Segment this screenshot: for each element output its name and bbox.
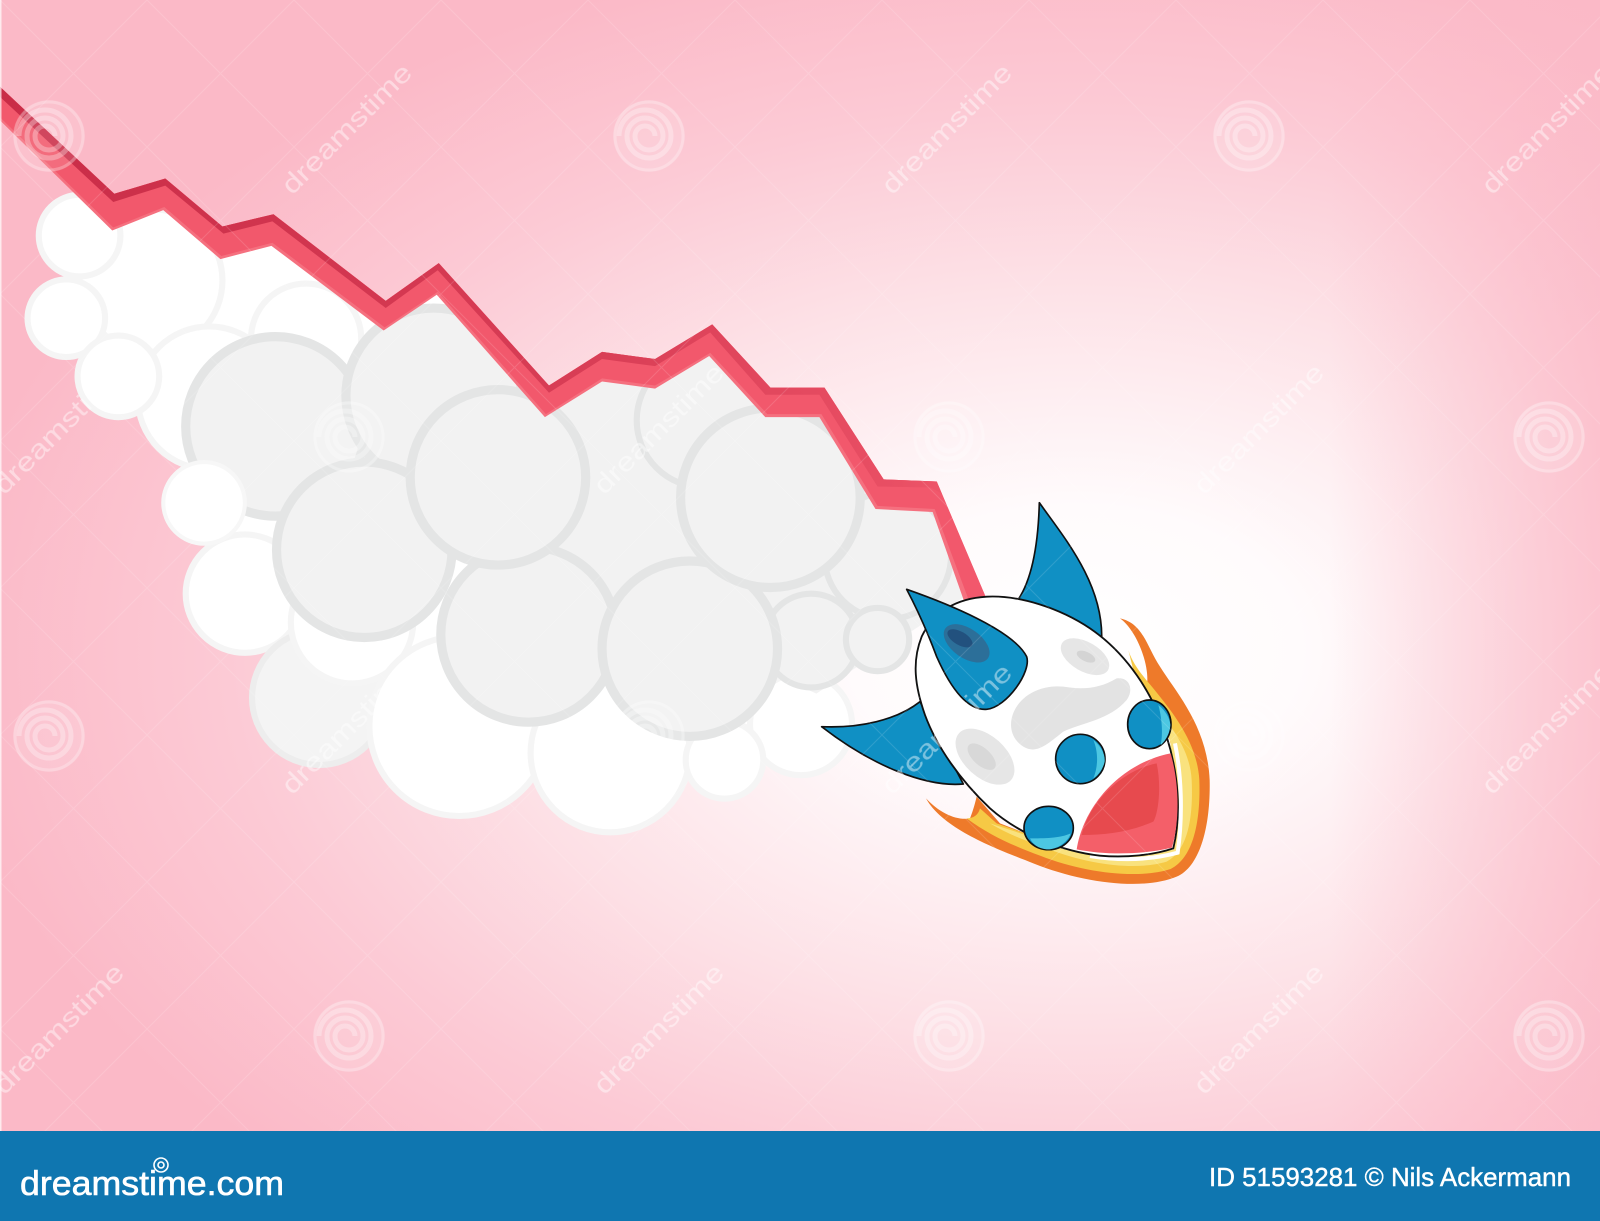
centre fin [907, 589, 1027, 709]
nose cone [1077, 753, 1178, 853]
rear fins [822, 503, 1102, 784]
watermark layer: dreamstime [275, 57, 418, 200]
rocket crashing [822, 503, 1210, 884]
portholes [1024, 700, 1171, 850]
flames [926, 618, 1210, 884]
footer credit: ID 51593281 © Nils Ackermann [1209, 1162, 1571, 1192]
watermark layer: dreamstime [275, 657, 418, 800]
watermark layer: dreamstime [875, 57, 1018, 200]
cloud of smoke [28, 195, 964, 832]
footer bar [0, 1131, 1600, 1221]
watermark layer: dreamstime [587, 357, 730, 500]
watermark layer: dreamstime [1475, 657, 1600, 800]
falling red line chart [0, 87, 988, 602]
watermark layer: dreamstime [1187, 957, 1330, 1100]
footer logo text: dreamstime.com [20, 1165, 284, 1203]
hull patches [945, 631, 1130, 795]
watermark layer: dreamstime [875, 657, 1018, 800]
watermark layer: dreamstime [587, 957, 730, 1100]
watermark layer: dreamstime [1187, 357, 1330, 500]
watermark layer: dreamstime [1475, 57, 1600, 200]
rocket body [916, 597, 1178, 856]
left edge hairline [0, 0, 2, 1131]
footer logo icon [154, 1158, 168, 1172]
